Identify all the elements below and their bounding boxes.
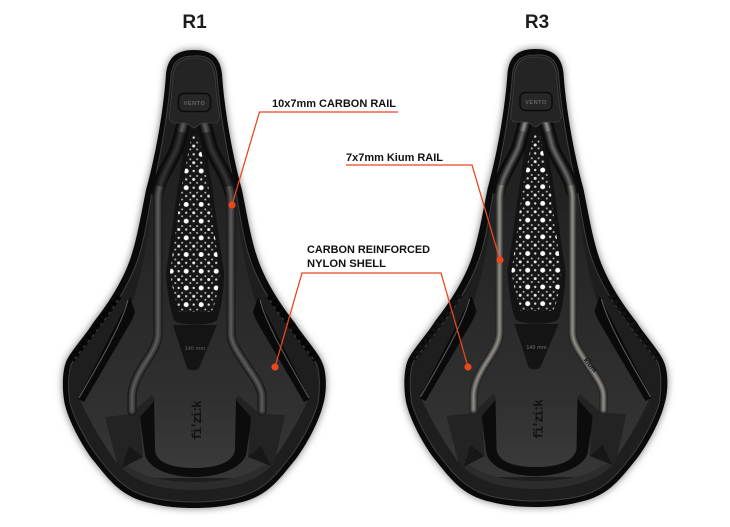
wing slit right <box>594 296 652 401</box>
left rail mid <box>474 121 526 410</box>
lattice holes <box>170 134 220 312</box>
size mark: 140 mm <box>185 346 205 352</box>
logo: fizik: fi'zi:k <box>190 400 205 440</box>
right rail mid <box>546 121 604 410</box>
callout: carbon rail <box>228 98 398 209</box>
lattice lower wedge <box>173 325 217 370</box>
badge: VENTO: VENTO <box>525 100 547 106</box>
right rail <box>204 122 262 411</box>
saddle shadow <box>404 49 667 507</box>
left rail mid <box>132 122 184 411</box>
slit highlight left <box>79 300 128 398</box>
shell inner rim <box>410 55 661 501</box>
wing holes left <box>72 296 119 360</box>
panel: R1 saddle <box>63 50 326 508</box>
callout: Kium rail <box>346 152 504 264</box>
title: R3: R3 <box>525 12 549 33</box>
rear clip shade right <box>248 446 271 466</box>
wing slit left <box>78 297 135 402</box>
rear clip left <box>446 394 496 467</box>
badge: VENTO: VENTO <box>184 101 206 107</box>
wing slit right <box>253 297 310 402</box>
badge: VENTO <box>178 94 210 112</box>
rail mark: kium: kium <box>582 357 598 374</box>
lattice holes <box>512 133 562 311</box>
rear U channel <box>482 397 594 476</box>
upper rail shade right <box>207 132 230 186</box>
right rail highlight <box>204 122 262 411</box>
right rail <box>546 121 604 410</box>
shell outer edge <box>404 49 667 507</box>
panel: R3 saddle <box>404 49 667 507</box>
badge: VENTO <box>520 92 552 110</box>
rear U channel <box>140 398 252 477</box>
rail channel left <box>498 121 526 194</box>
rear pad <box>496 399 576 467</box>
nose plate <box>510 57 562 127</box>
callout: carbon rail: 10x7mm CARBON RAIL <box>272 98 396 110</box>
rear clip left <box>105 395 155 468</box>
shell outer edge <box>63 50 326 508</box>
left rail <box>474 121 526 410</box>
rear pad <box>155 400 235 468</box>
rear clip shade left <box>122 446 143 468</box>
callout: carbon reinforced nylon shell: CARBON REINFORCED <box>307 244 430 256</box>
rail channel right <box>546 121 574 194</box>
slit highlight right <box>260 300 309 398</box>
wing holes right <box>610 295 658 359</box>
wing holes left <box>414 295 460 359</box>
shell body <box>422 121 650 477</box>
left rail highlight <box>132 122 184 411</box>
callout: carbon reinforced nylon shell: NYLON SHELL <box>307 258 386 270</box>
size mark: 140 mm <box>526 345 547 351</box>
right rail highlight <box>546 121 604 410</box>
left rail highlight <box>474 121 526 410</box>
lattice surround <box>166 124 224 324</box>
lattice lower wedge <box>514 324 558 369</box>
upper rail shade left <box>500 131 522 185</box>
upper rail shade right <box>548 131 572 185</box>
saddle shadow <box>63 50 326 508</box>
slit highlight left <box>420 299 470 397</box>
wing holes right <box>269 296 316 360</box>
rail channel left <box>156 122 184 195</box>
rear clip right <box>578 394 626 465</box>
slit highlight right <box>602 299 650 397</box>
rear clip shade left <box>464 445 484 467</box>
rear band <box>118 464 273 490</box>
callout: Kium rail: 7x7mm Kium RAIL <box>346 152 443 164</box>
shell body <box>80 122 308 478</box>
shell inner rim <box>69 56 319 502</box>
rear band <box>460 463 614 489</box>
nose plate <box>169 58 220 128</box>
wing slit left <box>420 296 476 401</box>
rear clip shade right <box>590 445 612 465</box>
logo: fizik: fi'zi:k <box>532 399 546 439</box>
left rail <box>132 122 184 411</box>
upper rail shade left <box>159 132 181 186</box>
right rail mid <box>204 122 262 411</box>
lattice surround <box>508 123 566 324</box>
callout: carbon reinforced nylon shell <box>271 244 472 371</box>
rail channel right <box>204 122 232 195</box>
title: R1: R1 <box>182 12 207 33</box>
rear clip right <box>236 395 285 466</box>
